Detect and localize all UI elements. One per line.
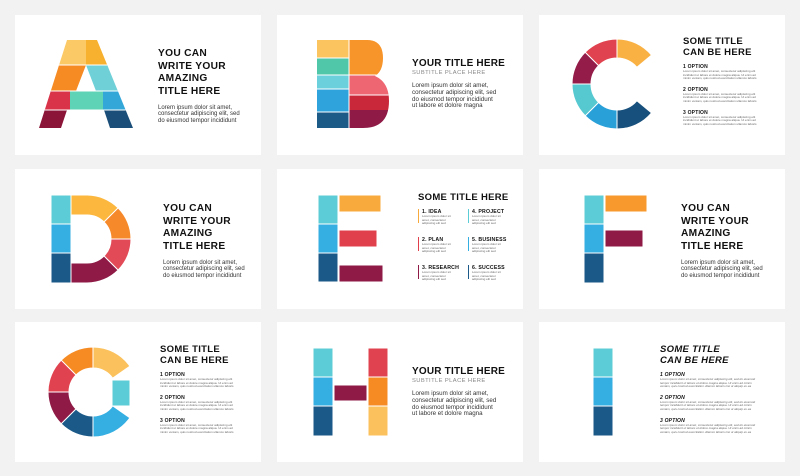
- text: F title and body: consectetur adipiscing elit, sed: [681, 266, 763, 272]
- text: F title and body: TITLE HERE: [681, 240, 743, 252]
- text: C options: Lorem ipsum dolor sit amet, consectetur adipiscing elit: [683, 92, 755, 96]
- text: E title: SOME TITLE HERE: [418, 192, 509, 203]
- text: G options: incididunt ut labore et dolore magna aliqua. Ut enim ad: [160, 403, 233, 407]
- text: C options: 3 OPTION: [683, 110, 708, 116]
- text: C options: 1 OPTION: [683, 64, 708, 70]
- text: C options: incididunt ut labore et dolore magna aliqua. Ut enim ad: [683, 73, 756, 77]
- text: A title and body: AMAZING: [158, 73, 208, 84]
- text: G options: Lorem ipsum dolor sit amet, consectetur adipiscing elit: [160, 423, 232, 427]
- panel: C: [539, 15, 785, 155]
- list: E items: Lorem ipsum dolor sit: [472, 214, 501, 218]
- list: E items: adipiscing elit sed: [422, 221, 446, 225]
- text: A title and body: Lorem ipsum dolor sit amet,: [158, 105, 232, 111]
- text: G options: incididunt ut labore et dolore magna aliqua. Ut enim ad: [160, 381, 233, 385]
- text: G options: minim veniam, quis nostrud exercitation ullamco laboris: [160, 430, 234, 434]
- text: H title: Lorem ipsum dolor sit amet,: [412, 390, 488, 397]
- text: B title: do eiusmod tempor incididunt: [412, 96, 493, 103]
- text: I options: Lorem ipsum dolor sit amet, consectetur adipiscing elit, sed do eiusmod: [660, 400, 755, 404]
- text: B title: consectetur adipiscing elit, sed: [412, 89, 496, 96]
- text: B title: Lorem ipsum dolor sit amet,: [412, 82, 488, 89]
- text: C options: incididunt ut labore et dolore magna aliqua. Ut enim ad: [683, 95, 756, 99]
- text: C options: 2 OPTION: [683, 87, 708, 93]
- text: I options: [660, 344, 756, 434]
- text: H title: ut labore et dolore magna: [412, 410, 483, 417]
- text: B title: ut labore et dolore magna: [412, 102, 483, 109]
- text: D title and body: WRITE YOUR: [163, 216, 231, 226]
- text: I options: veniam, quis nostrud exercitation ullamco laboris nisi ut aliquip ex ea: [660, 407, 751, 411]
- text: D title and body: consectetur adipiscing elit, sed: [163, 266, 245, 272]
- text: G options: minim veniam, quis nostrud exercitation ullamco laboris: [160, 384, 234, 388]
- list: E items: amet, consectetur: [472, 274, 496, 278]
- text: F title and body: AMAZING: [681, 228, 731, 239]
- text: F title and body: [681, 203, 763, 279]
- panel: B: [277, 15, 523, 155]
- text: I options: tempor incididunt ut labore et dolore magna aliqua. Ut enim ad minim: [660, 381, 752, 385]
- text: I options: 3 OPTION: [660, 418, 685, 424]
- text: A title and body: TITLE HERE: [158, 86, 220, 96]
- text: H title: YOUR TITLE HERE: [412, 366, 505, 377]
- text: G options: 1 OPTION: [160, 372, 185, 378]
- text: G options: [160, 344, 234, 434]
- text: H title: consectetur adipiscing elit, sed: [412, 397, 496, 404]
- text: D title and body: Lorem ipsum dolor sit amet,: [163, 260, 237, 266]
- text: G options: minim veniam, quis nostrud exercitation ullamco laboris: [160, 407, 234, 411]
- letter F: [584, 196, 646, 282]
- text: G options: SOME TITLE: [160, 344, 220, 355]
- text: F title and body: WRITE YOUR: [681, 216, 749, 226]
- text: D title and body: AMAZING: [163, 228, 213, 239]
- text: G options: Lorem ipsum dolor sit amet, consectetur adipiscing elit: [160, 377, 232, 381]
- list: E items: amet, consectetur: [422, 218, 446, 222]
- panel: D: [15, 169, 261, 309]
- list: E items: Lorem ipsum dolor sit: [472, 242, 501, 246]
- text: C options: Lorem ipsum dolor sit amet, consectetur adipiscing elit: [683, 115, 755, 119]
- text: I options: veniam, quis nostrud exercitation ullamco laboris nisi ut aliquip ex ea: [660, 384, 751, 388]
- text: I options: tempor incididunt ut labore et dolore magna aliqua. Ut enim ad minim: [660, 426, 752, 430]
- list: E items: Lorem ipsum dolor sit: [422, 242, 451, 246]
- text: C options: CAN BE HERE: [683, 46, 752, 58]
- list: E items: Lorem ipsum dolor sit: [422, 214, 451, 218]
- text: F title and body: Lorem ipsum dolor sit amet,: [681, 260, 755, 266]
- text: G options: incididunt ut labore et dolore magna aliqua. Ut enim ad: [160, 426, 233, 430]
- panel: F: [539, 169, 785, 309]
- text: I options: tempor incididunt ut labore et dolore magna aliqua. Ut enim ad minim: [660, 403, 752, 407]
- list: E items: adipiscing elit sed: [472, 277, 496, 281]
- letter C ring: [572, 40, 651, 128]
- text: G options: Lorem ipsum dolor sit amet, consectetur adipiscing elit: [160, 400, 232, 404]
- panel: E: [277, 169, 523, 309]
- panel: G: [15, 322, 261, 462]
- text: C options: minim veniam, quis nostrud exercitation ullamco laboris: [683, 122, 757, 126]
- text: C options: Lorem ipsum dolor sit amet, consectetur adipiscing elit: [683, 69, 755, 73]
- text: C options: incididunt ut labore et dolore magna aliqua. Ut enim ad: [683, 118, 756, 122]
- text: I options: 2 OPTION: [660, 395, 685, 401]
- text: I options: veniam, quis nostrud exercitation ullamco laboris nisi ut aliquip ex ea: [660, 430, 751, 434]
- text: C options: SOME TITLE: [683, 36, 743, 47]
- letter B: [317, 40, 389, 128]
- panel: A: [15, 15, 261, 155]
- text: C options: [683, 36, 757, 126]
- text: H title: [412, 366, 505, 417]
- letter D: [52, 196, 130, 282]
- list: E items: adipiscing elit sed: [472, 221, 496, 225]
- text: C options: minim veniam, quis nostrud exercitation ullamco laboris: [683, 99, 757, 103]
- text: D title and body: TITLE HERE: [163, 240, 225, 252]
- list: E items: adipiscing elit sed: [422, 249, 446, 253]
- letter A: [39, 40, 133, 128]
- text: B title: [412, 58, 505, 109]
- letter G: [48, 348, 130, 436]
- list: E items: Lorem ipsum dolor sit: [472, 270, 501, 274]
- text: G options: 3 OPTION: [160, 418, 185, 424]
- list: E items: Lorem ipsum dolor sit: [422, 270, 451, 274]
- letter I: [594, 348, 612, 436]
- text: A title and body: WRITE YOUR: [158, 60, 226, 72]
- letter E: [318, 196, 382, 282]
- letter H: [314, 348, 388, 436]
- text: H title: do eiusmod tempor incididunt: [412, 404, 493, 411]
- list: E items: [418, 209, 506, 281]
- text: I options: 1 OPTION: [660, 372, 685, 378]
- list: E items: adipiscing elit sed: [472, 249, 496, 253]
- text: A title and body: [158, 48, 240, 124]
- panel: I: [539, 322, 785, 462]
- list: E items: 1. IDEA: [422, 209, 442, 215]
- text: C options: minim veniam, quis nostrud exercitation ullamco laboris: [683, 76, 757, 80]
- list: E items: 5. BUSINESS: [472, 237, 506, 243]
- text: A title and body: do eiusmod tempor incididunt: [158, 118, 236, 124]
- text: I options: CAN BE HERE: [660, 354, 729, 366]
- text: G options: 2 OPTION: [160, 395, 185, 401]
- text: B title: SUBTITLE PLACE HERE: [412, 70, 486, 76]
- text: H title: SUBTITLE PLACE HERE: [412, 378, 486, 384]
- list: E items: amet, consectetur: [472, 218, 496, 222]
- list: E items: amet, consectetur: [422, 246, 446, 250]
- list: E items: amet, consectetur: [422, 274, 446, 278]
- list: E items: adipiscing elit sed: [422, 277, 446, 281]
- text: G options: CAN BE HERE: [160, 354, 229, 366]
- text: I options: SOME TITLE: [660, 344, 720, 355]
- text: F title and body: do eiusmod tempor incididunt: [681, 273, 759, 279]
- text: B title: YOUR TITLE HERE: [412, 58, 505, 69]
- text: F title and body: YOU CAN: [681, 203, 730, 214]
- list: E items: 3. RESEARCH: [422, 265, 459, 271]
- list: E items: amet, consectetur: [472, 246, 496, 250]
- text: D title and body: YOU CAN: [163, 203, 212, 214]
- text: I options: Lorem ipsum dolor sit amet, consectetur adipiscing elit, sed do eiusmod: [660, 377, 755, 381]
- list: E items: 2. PLAN: [422, 237, 443, 243]
- text: A title and body: consectetur adipiscing elit, sed: [158, 111, 240, 117]
- list: E items: 4. PROJECT: [472, 209, 504, 215]
- text: D title and body: [163, 203, 245, 279]
- list: E items: 6. SUCCESS: [472, 265, 505, 271]
- text: D title and body: do eiusmod tempor incididunt: [163, 273, 241, 279]
- text: A title and body: YOU CAN: [158, 48, 207, 59]
- panel: H: [277, 322, 523, 462]
- text: I options: Lorem ipsum dolor sit amet, consectetur adipiscing elit, sed do eiusmod: [660, 423, 755, 427]
